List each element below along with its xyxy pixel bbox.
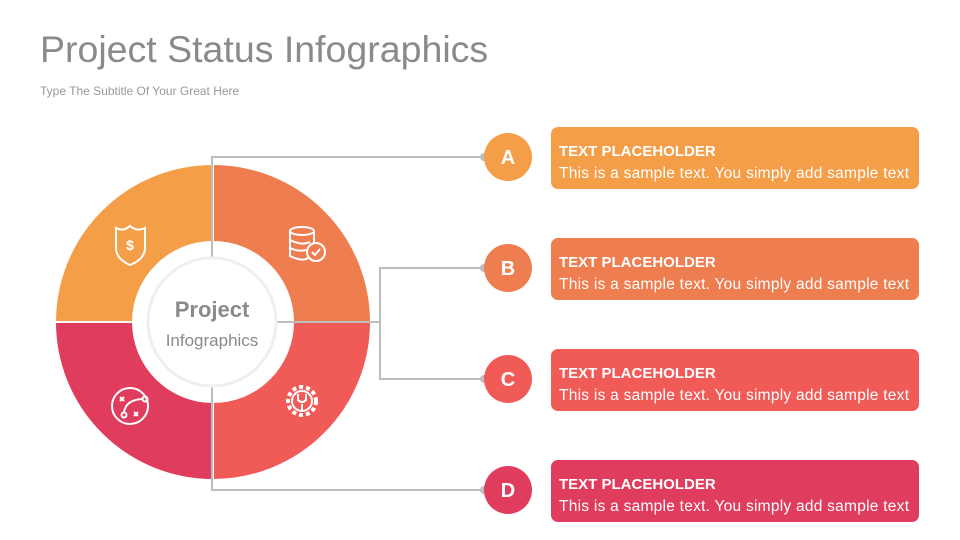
- text boxes: This is a sample text. You simply add sample text: [559, 498, 910, 515]
- icon: database check: [290, 227, 325, 261]
- icon: strategy: [112, 388, 148, 424]
- text boxes: TEXT PLACEHOLDER: [559, 254, 716, 271]
- donut chart: [55, 164, 371, 480]
- text boxes: This is a sample text. You simply add sample text: [559, 387, 910, 404]
- title: Project Status Infographics: [40, 28, 488, 70]
- center label: [166, 297, 258, 350]
- markers A-D: C: [501, 369, 515, 391]
- icon: gear wrench: [288, 387, 316, 415]
- center label: Infographics: [166, 331, 258, 350]
- text boxes: TEXT PLACEHOLDER: [559, 476, 716, 493]
- subtitle: Type The Subtitle Of Your Great Here: [40, 84, 239, 98]
- text boxes: [551, 127, 919, 522]
- text boxes: TEXT PLACEHOLDER: [559, 365, 716, 382]
- center label: Project: [175, 297, 250, 322]
- connector lines: [212, 157, 484, 490]
- text boxes: This is a sample text. You simply add sample text: [559, 276, 910, 293]
- text boxes: TEXT PLACEHOLDER: [559, 143, 716, 160]
- icon: shield dollar: $: [126, 237, 134, 253]
- icon: shield dollar: [116, 226, 145, 265]
- markers A-D: B: [501, 258, 515, 280]
- markers A-D: D: [501, 480, 515, 502]
- text boxes: This is a sample text. You simply add sample text: [559, 165, 910, 182]
- markers A-D: A: [501, 147, 515, 169]
- center circle: [148, 258, 276, 386]
- markers A-D: [480, 133, 532, 514]
